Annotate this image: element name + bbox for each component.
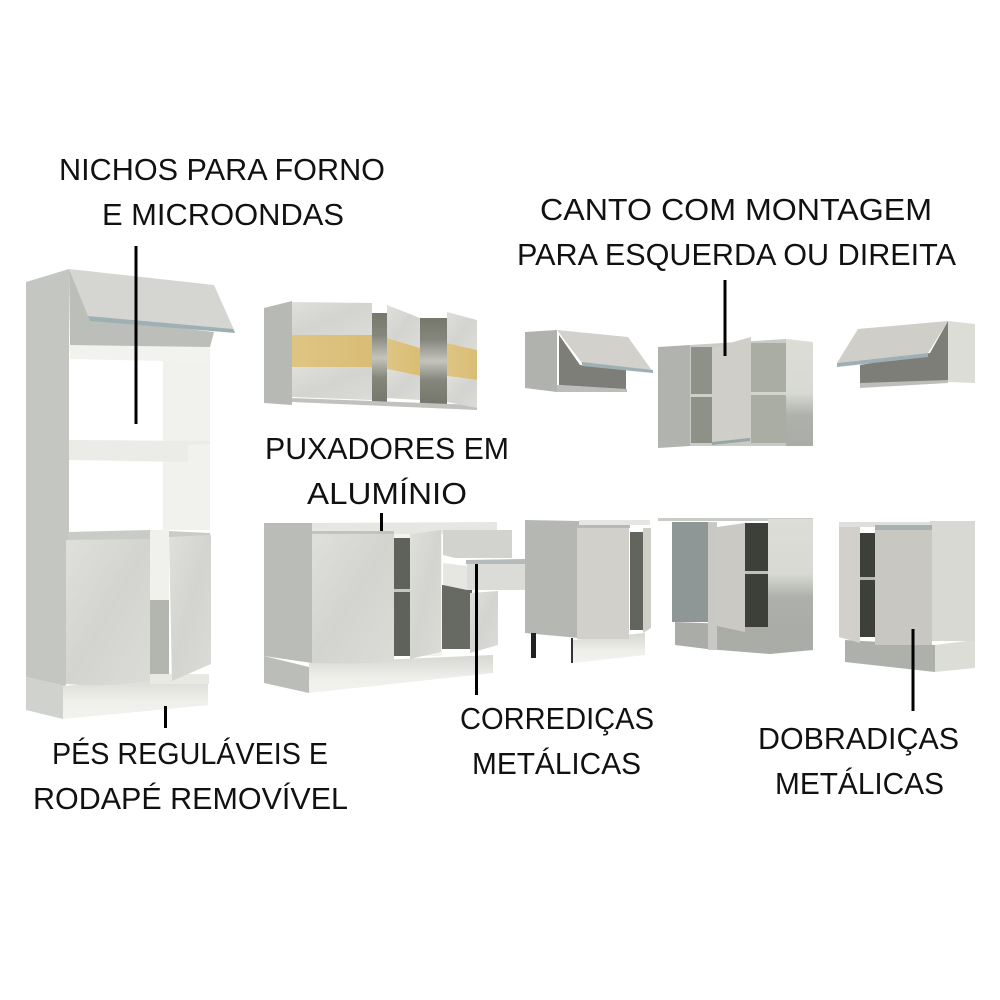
- label: nichos: NICHOS PARA FORNO: [59, 152, 385, 187]
- plinth: [675, 622, 813, 654]
- label: dobradiças: DOBRADIÇAS: [758, 721, 959, 756]
- side: [525, 520, 579, 638]
- middle door: [410, 530, 441, 659]
- right base cabinet: [839, 521, 975, 672]
- side: [948, 321, 975, 383]
- label: puxadores: PUXADORES EM: [265, 431, 509, 466]
- wall cabinet with glass doors: [264, 301, 477, 410]
- door three: [447, 312, 477, 350]
- base cabinet with drawers: [264, 522, 525, 693]
- plinth: [573, 633, 645, 663]
- middle shelf: [69, 440, 210, 462]
- interior: [860, 533, 875, 637]
- left interior: [691, 347, 712, 443]
- left door: [66, 539, 150, 685]
- drawer one: [443, 530, 512, 558]
- side: [264, 301, 292, 405]
- label: pés: RODAPÉ REMOVÍVEL: [33, 781, 348, 816]
- side: [525, 330, 557, 392]
- door: [717, 523, 745, 632]
- frame: [690, 339, 786, 446]
- label: dobradiças: METÁLICAS: [775, 766, 944, 801]
- label: pés: PÉS REGULÁVEIS E: [52, 736, 328, 771]
- label: corrediças: METÁLICAS: [472, 746, 641, 781]
- corner wall cabinet: [658, 337, 813, 448]
- top: [579, 520, 650, 525]
- label: canto: PARA ESQUERDA OU DIREITA: [517, 237, 956, 272]
- interior: [860, 321, 948, 385]
- small door: [839, 527, 860, 643]
- label: nichos: E MICROONDAS: [102, 197, 344, 232]
- lower counter: [68, 530, 150, 540]
- tall oven cabinet: [26, 269, 235, 719]
- door: [712, 337, 751, 442]
- label: corrediças: [460, 701, 654, 781]
- left panel: [658, 345, 690, 448]
- lower interior: [150, 530, 169, 600]
- interior metal: [372, 313, 387, 403]
- right door: [470, 591, 498, 653]
- handle: [837, 353, 928, 367]
- legs: [531, 633, 536, 658]
- door: [577, 527, 629, 639]
- flap: [837, 321, 948, 363]
- plinth: [63, 674, 208, 719]
- right interior: [751, 343, 786, 443]
- right side: [768, 519, 813, 628]
- wall cabinet left flap: [525, 330, 653, 392]
- right door: [169, 535, 211, 681]
- label: corrediças: CORREDIÇAS: [460, 701, 654, 736]
- big door: [875, 525, 932, 645]
- corner base cabinet: [658, 518, 813, 654]
- interior: [745, 523, 768, 627]
- door one: [292, 302, 372, 335]
- label: canto: [517, 192, 956, 272]
- top: [839, 522, 931, 527]
- right interior panel: [163, 345, 210, 530]
- interior: [630, 532, 643, 630]
- handle: [712, 438, 750, 445]
- under-flap shadow: [69, 269, 214, 347]
- wall cabinet right flap: [837, 321, 975, 388]
- flap door: [69, 269, 235, 332]
- right side: [786, 339, 813, 446]
- top: [312, 522, 497, 534]
- base cabinet with legs: [525, 520, 651, 663]
- handle: [582, 362, 653, 373]
- left side panel: [26, 269, 69, 686]
- label: puxadores: ALUMÍNIO: [307, 476, 467, 511]
- label: dobradiças: [758, 721, 959, 801]
- left door: [312, 533, 394, 663]
- side: [264, 523, 312, 663]
- label: nichos: [59, 152, 385, 232]
- label: canto: CANTO COM MONTAGEM: [540, 192, 932, 227]
- top: [658, 518, 813, 521]
- pointer lines: [134, 246, 914, 728]
- door two: [387, 305, 420, 348]
- drawer two: [467, 560, 525, 590]
- back door: [672, 522, 708, 622]
- label: pés: [33, 736, 348, 816]
- aluminium handle: [88, 316, 235, 333]
- interior: [394, 534, 442, 656]
- plinth: [264, 656, 309, 693]
- label: puxadores: [265, 431, 509, 511]
- drawer two side: [443, 563, 467, 590]
- interior: [559, 335, 626, 389]
- right side: [930, 521, 975, 641]
- flap: [557, 330, 653, 372]
- plinth: [845, 640, 935, 672]
